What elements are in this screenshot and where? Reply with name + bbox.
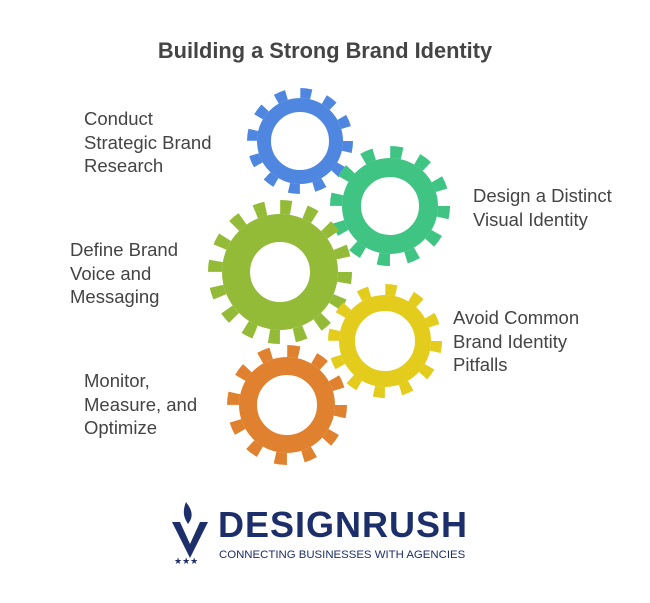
label: pitfalls [453, 307, 579, 375]
label: voice: Define Brand [70, 239, 178, 260]
logo icon [172, 502, 208, 565]
label: monitor: Monitor, [84, 370, 150, 391]
logo [172, 502, 468, 565]
label: monitor [84, 370, 197, 438]
label: visual: Design a Distinct [473, 185, 612, 206]
label: research: Research [84, 155, 163, 176]
title: Building a Strong Brand Identity [158, 38, 492, 63]
gear: blue [252, 93, 348, 189]
logo text: DESIGNRUSH [218, 504, 468, 545]
label: research [84, 108, 212, 176]
label: visual: Visual Identity [473, 208, 588, 230]
gear: orange [233, 351, 341, 459]
label: visual [473, 185, 612, 230]
label: pitfalls: Pitfalls [453, 354, 508, 375]
label: research: Conduct [84, 108, 153, 129]
gear: olive [215, 207, 345, 337]
label: monitor: Optimize [84, 417, 157, 438]
gear: green [336, 152, 444, 260]
tagline: CONNECTING BUSINESSES WITH AGENCIES [219, 549, 465, 561]
gear: yellow [334, 290, 436, 392]
label: research: Strategic Brand [84, 132, 212, 152]
label: voice: Voice and [70, 262, 151, 284]
label: voice: Messaging [70, 286, 159, 307]
label: pitfalls: Avoid Common [453, 307, 579, 328]
label: monitor: Measure, and [84, 394, 197, 414]
label: voice [70, 239, 178, 307]
label: pitfalls: Brand Identity [453, 330, 567, 352]
